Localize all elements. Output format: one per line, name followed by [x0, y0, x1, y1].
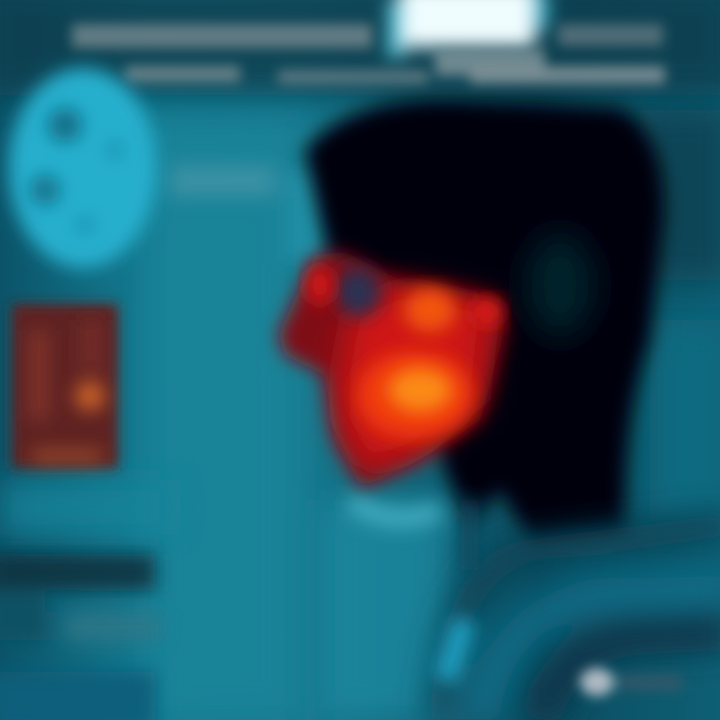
head silhouette — [305, 99, 664, 540]
heatmap: right upper hot spot — [472, 298, 502, 326]
panel: dark lower-left block — [0, 554, 160, 720]
title: illegible blurred heading bars — [72, 24, 665, 84]
heatmap: red inflamed throat region — [278, 252, 505, 488]
neck and shoulder arcs — [440, 525, 720, 720]
neck highlights — [350, 500, 470, 680]
heatmap: upper hot spot — [404, 288, 456, 332]
panel: red card — [12, 304, 118, 468]
logo: lower-right badge — [580, 668, 682, 696]
text block: upper middle caption — [170, 165, 327, 260]
heatmap: main hot spot — [357, 351, 473, 439]
panel: cyan circular icon — [9, 68, 157, 268]
nose red spot — [306, 265, 334, 305]
top light glow — [388, 0, 548, 58]
ear shadow — [526, 233, 594, 337]
nose dark detail — [336, 268, 380, 316]
icon: orange highlights in red card — [30, 320, 105, 462]
icon: circle inner spots — [30, 108, 124, 235]
